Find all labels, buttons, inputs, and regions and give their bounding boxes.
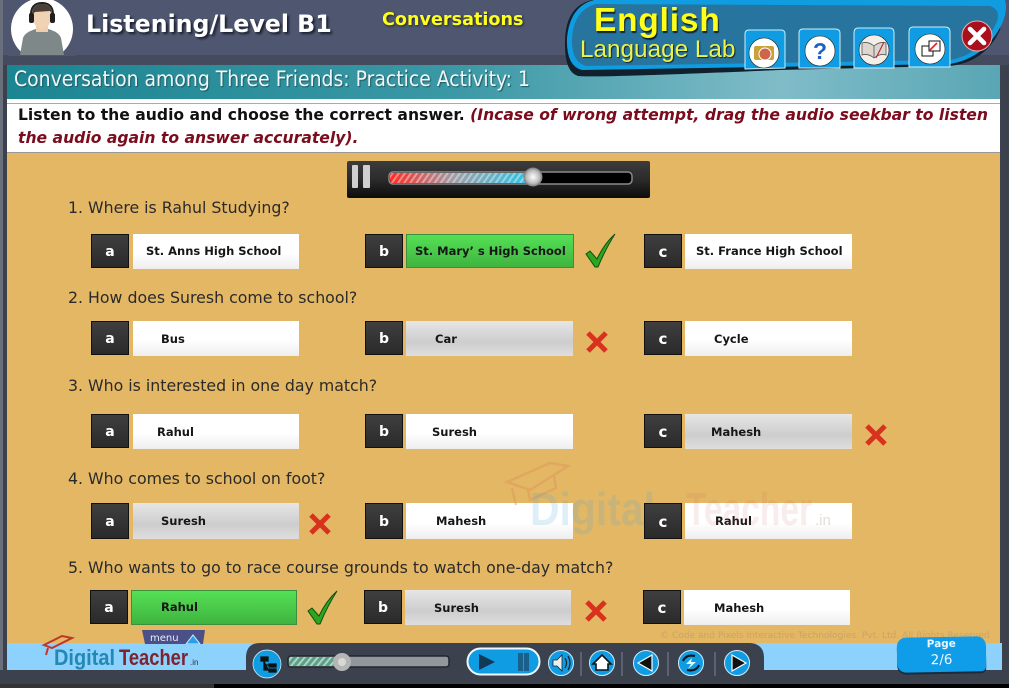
icon: check mark [307, 590, 338, 624]
page number: 2/6 [931, 652, 953, 668]
instruction text: the audio again to answer accurately). [18, 129, 358, 147]
instruction text: Listen to the audio and choose the correct answer. (Incase of wrong attempt, drag the audio seekbar to listen [18, 106, 988, 124]
logo text: Language Lab: Language Lab [580, 36, 735, 63]
logo: Digital Teacher: Teacher [119, 645, 188, 670]
q1 option a [91, 234, 299, 269]
right frame edge [1002, 65, 1009, 684]
q4 option c field [685, 503, 852, 539]
question 2: 2. How does Suresh come to school? [68, 288, 357, 307]
q4 option c field: Rahul [715, 514, 752, 528]
question 3: 3. Who is interested in one day match? [68, 376, 377, 395]
q4 option b [365, 503, 573, 539]
watermark logo: .in [815, 512, 831, 529]
logo: Digital Teacher [42, 635, 198, 670]
avatar: listener with headphones [8, 0, 76, 56]
q5 option a: correct: Rahul [161, 600, 198, 614]
q3 option a [91, 414, 299, 449]
question 1: 1. Where is Rahul Studying? [68, 198, 290, 217]
q2 option c [644, 321, 852, 356]
page label: Page [927, 638, 956, 650]
strip below header [0, 55, 1009, 65]
q5 option b: wrong: Suresh [434, 601, 479, 615]
q3 option a: Rahul [157, 425, 194, 439]
light blue footer strip [7, 643, 1002, 670]
q3 option a: a [105, 424, 115, 440]
q1 option b: correct [365, 234, 574, 268]
q1 option c: St. France High School [696, 244, 843, 258]
q4 option c tile: c [659, 513, 667, 531]
teal title band [7, 65, 1000, 99]
copyright note: © Code and Pixels Interactive Technologies. Pvt. Ltd. All Rights Reserved [660, 631, 990, 641]
q3 option b: Suresh [432, 425, 477, 439]
q4 option a: wrong: a [105, 514, 115, 530]
bottom frame [0, 670, 1009, 684]
activity title: Conversation among Three Friends: Practice Activity: 1 [14, 67, 530, 91]
q5 option b: wrong: b [378, 600, 388, 616]
question 5: 5. Who wants to go to race course grounds to watch one-day match? [68, 558, 613, 577]
menu tab: menu [150, 633, 179, 644]
icon: check mark [585, 234, 616, 268]
q5 option b: wrong [364, 590, 571, 625]
q1 option a: St. Anns High School [146, 244, 281, 258]
logo: Digital Teacher: Digital [54, 645, 115, 670]
q1 option c [644, 234, 852, 269]
q4 option a: wrong [91, 503, 299, 539]
q5 option c: Mahesh [714, 601, 764, 615]
q4 option a: wrong: Suresh [161, 514, 206, 528]
left frame edge [0, 0, 3, 688]
q1 option c: c [659, 243, 667, 261]
control bar [246, 643, 764, 678]
bottom black edge [214, 684, 1009, 688]
q2 option b: wrong: Car [435, 332, 457, 346]
q5 option a: correct [90, 590, 297, 625]
logo text: English: English [594, 2, 721, 39]
q2 option b: wrong: b [379, 331, 389, 347]
top header bar [0, 0, 1009, 55]
q5 option c: c [658, 599, 666, 617]
English Language Lab panel: ? [813, 38, 827, 64]
audio player [347, 161, 650, 198]
q1 option a: a [105, 244, 115, 260]
q4 option b: Mahesh [436, 514, 486, 528]
q1 option b: correct: b [379, 244, 389, 260]
q4 option b: b [379, 514, 389, 530]
q5 option a: correct: a [104, 600, 114, 616]
heading: Conversations: Conversations [382, 10, 523, 30]
q2 option a [91, 321, 299, 356]
white instruction panel [7, 99, 1000, 153]
heading: Listening/Level B1: Listening/Level B1 [86, 10, 332, 38]
logo: Digital Teacher: .in [190, 658, 198, 667]
page counter badge [897, 636, 986, 673]
q1 option b: correct: St. Mary’ s High School [415, 244, 566, 258]
q3 option b [365, 414, 573, 449]
q5 option c [643, 590, 850, 625]
icon: cross [585, 600, 607, 622]
bottom left edge [0, 684, 214, 688]
left frame inner [3, 65, 7, 684]
question 4: 4. Who comes to school on foot? [68, 469, 325, 488]
icon: cross [586, 331, 608, 353]
q3 option c: wrong: c [659, 423, 667, 441]
instruction text [18, 106, 988, 147]
English Language Lab panel [564, 0, 1006, 76]
watermark logo: Digital [530, 483, 655, 535]
icon: cross [309, 513, 331, 535]
q2 option c: c [659, 330, 667, 348]
q2 option a: Bus [161, 332, 185, 346]
menu tab [142, 630, 205, 644]
q4 option c tile [644, 503, 682, 539]
q2 option c: Cycle [714, 332, 748, 346]
q2 option a: a [105, 331, 115, 347]
q3 option c: wrong [644, 414, 852, 449]
icon: cross [865, 424, 887, 446]
q3 option b: b [379, 424, 389, 440]
watermark logo [504, 462, 831, 535]
tan activity panel [7, 153, 1000, 643]
q2 option b: wrong [365, 321, 573, 356]
q3 option c: wrong: Mahesh [711, 425, 761, 439]
